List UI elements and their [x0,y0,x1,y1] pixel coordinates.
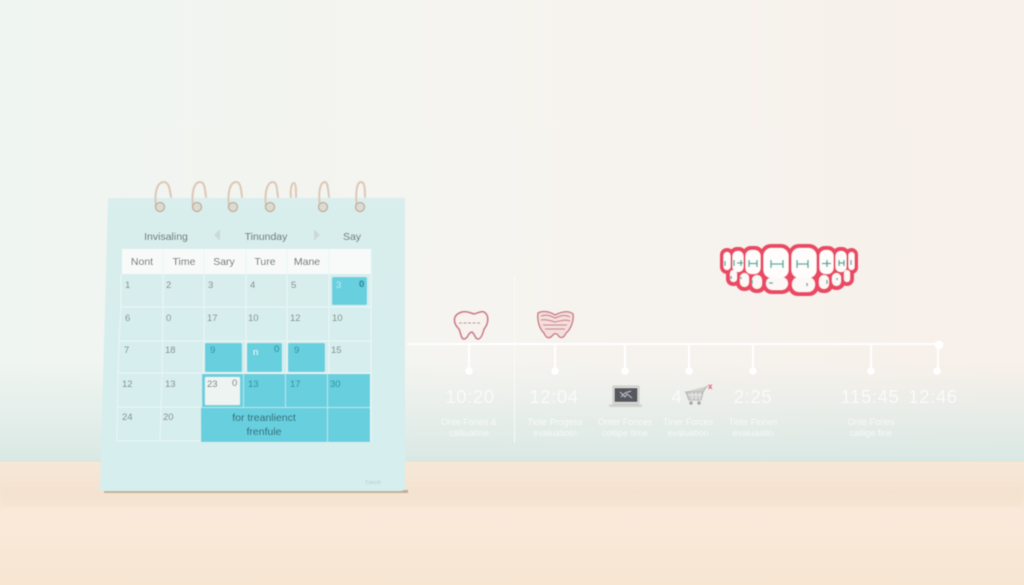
timeline axis [407,343,938,345]
calendar dates: 13 [165,379,176,390]
calendar dates: 4 [250,280,255,291]
milestone captions [441,417,895,438]
time labels: 4 [672,386,682,407]
milestone captions: evaluatiotn [533,428,577,438]
calendar dates: 23 [207,379,218,390]
milestone captions: Tiote Progess [527,417,583,427]
milestone captions: Onte Fones & [441,417,497,427]
calendar dates: 2 [166,280,171,291]
weekday header: Mane [294,256,320,268]
calendar [100,182,408,493]
time labels: 12:46 [908,386,958,407]
calendar page [100,198,408,493]
calendar dates: 10 [248,313,259,324]
weekday header: Sary [213,256,236,268]
calendar dates: 7 [124,345,129,356]
calendar title row: Invisaling [144,231,188,243]
calendar dates: 9 [294,345,299,356]
calendar dates: 3 [336,280,341,291]
upper teeth [724,248,854,278]
calendar title row [144,229,362,243]
calendar title row: Tinunday [245,231,288,243]
wooden table [0,462,1024,585]
treatment schedule label: frenfule [246,426,282,438]
timeline stems and nodes [465,340,944,375]
milestone captions: evaluaatin [732,428,774,438]
milestone captions: calliuatine [449,428,489,438]
milestone captions: cotlipe tIme [602,428,648,438]
calendar dates: 10 [332,313,343,324]
calendar dates: 17 [207,313,218,324]
calendar dates: 0 [359,279,364,290]
icon: shopping cart [685,382,713,405]
calendar dates: 20 [163,412,174,423]
time labels [445,386,958,407]
milestone captions: Onter Fonces [598,417,653,427]
calendar dates: 6 [125,313,130,324]
milestone captions: Tiote Fiones [728,417,778,427]
wall background [0,0,1024,463]
milestone captions: Tiner Forces [663,417,714,427]
milestone captions: Onte Fories [847,417,895,427]
time labels: 2:25 [734,386,772,407]
milestone captions: callige fine [850,428,892,438]
lower teeth [730,270,850,292]
calendar dates: 18 [165,345,176,356]
calendar dates: 24 [122,412,133,423]
icon: tooth outline [454,312,488,339]
calendar dates: n [253,347,258,358]
calendar dates: 15 [331,345,342,356]
calendar dates: 0 [274,344,279,355]
calendar grid lines [117,249,371,441]
braces [725,260,851,286]
calendar dates: 3 [208,280,213,291]
calendar title row: Say [343,231,362,243]
divider [514,275,515,443]
time labels: 10:20 [445,386,495,407]
time labels: 12:04 [529,386,579,407]
gum outline [723,247,855,293]
icon: tooth with aligner [538,312,573,338]
weekday header: Nont [131,256,153,268]
calendar dates: 17 [290,379,301,390]
highlighted cells [201,277,370,442]
treatment schedule label [232,412,296,438]
icon: shopping cart: x [708,382,713,391]
calendar dates: 12 [290,313,301,324]
calendar dates: 1 [125,280,130,291]
calendar dates: 9 [210,345,215,356]
icon: teeth with braces [723,247,855,293]
milestone captions: evaluation [667,428,709,438]
treatment schedule label: for treanlienct [232,412,296,424]
calendar footer mark: Cancel [365,480,381,486]
calendar dates [122,279,364,423]
binding rings [155,182,365,212]
calendar dates: 0 [232,378,237,389]
weekday header: Time [173,256,196,268]
time labels: 115:45 [841,386,899,407]
calendar dates: 13 [248,379,259,390]
weekday header [122,249,371,274]
calendar dates: 30 [330,379,341,390]
calendar dates: 0 [166,313,171,324]
icon: laptop [609,386,642,407]
calendar dates: 5 [291,280,296,291]
weekday header: Ture [254,256,276,268]
calendar dates: 12 [122,379,133,390]
timeline [407,247,958,443]
